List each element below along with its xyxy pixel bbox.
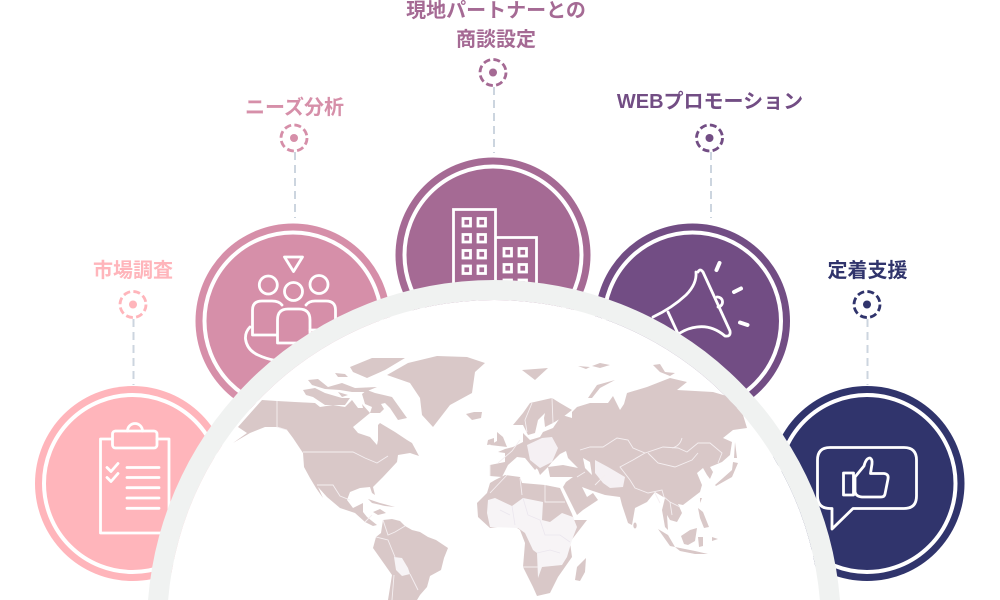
step 1: market research <box>35 259 230 581</box>
Arctic islands <box>303 358 405 405</box>
icon: thumbs-up speech bubble <box>818 448 916 529</box>
Sakhalin and Japan <box>715 442 738 486</box>
Iceland <box>466 412 482 420</box>
target marker <box>120 292 146 318</box>
Novaya Zemlya <box>588 380 615 398</box>
Madagascar <box>575 558 586 581</box>
Scandinavia <box>513 398 572 435</box>
Southeast Asian islands <box>658 498 718 554</box>
step 2: needs analysis <box>196 95 390 418</box>
target marker <box>480 60 506 86</box>
globe interior <box>168 300 820 600</box>
step 5: settlement support <box>770 259 964 581</box>
target marker <box>854 292 880 318</box>
step 3: local partner meetings <box>396 0 590 352</box>
circle badge <box>396 158 590 352</box>
icon: people <box>245 257 336 362</box>
world map <box>233 356 747 600</box>
icon: megaphone <box>653 263 748 338</box>
faint African borders <box>500 498 570 553</box>
Baffin Island <box>362 390 407 420</box>
country borders <box>277 398 722 600</box>
label: WEBプロモーション: WEBプロモーション <box>617 90 803 113</box>
label: 定着支援: 定着支援 <box>828 259 908 282</box>
circle badge <box>35 386 230 581</box>
Svalbard <box>522 368 548 380</box>
Greenland <box>387 356 485 427</box>
circle badge <box>595 224 790 418</box>
Africa lighter regions <box>487 498 577 578</box>
icon: buildings <box>454 210 536 300</box>
connector line <box>866 319 868 385</box>
British Isles <box>487 432 507 447</box>
label: 現地パートナーとの商談設定: 現地パートナーとの <box>406 0 586 22</box>
northern islands <box>578 363 675 376</box>
target marker <box>281 125 307 151</box>
circle badge <box>770 386 964 581</box>
icon: clipboard <box>100 424 169 533</box>
connector line <box>493 87 495 153</box>
Africa <box>477 475 587 596</box>
arc ring <box>148 280 840 600</box>
target marker <box>696 125 722 151</box>
connector line <box>132 319 134 385</box>
Bolivia and Paraguay lighter region <box>394 557 410 576</box>
Europe and Asia lighter regions <box>527 437 625 488</box>
label: ニーズ分析: ニーズ分析 <box>245 95 344 119</box>
Eurasia <box>490 378 747 530</box>
Caribbean islands <box>368 499 395 515</box>
globe arc with world map <box>148 280 840 600</box>
inland seas <box>548 451 592 475</box>
South America <box>373 519 448 600</box>
label: 現地パートナーとの商談設定: 商談設定 <box>456 28 536 51</box>
circle badge <box>196 224 390 418</box>
label: 市場調査: 市場調査 <box>93 259 173 282</box>
North America <box>233 400 419 526</box>
Sri Lanka <box>633 522 637 528</box>
connector line <box>294 152 296 218</box>
step 4: web promotion <box>595 90 803 418</box>
connector line <box>710 152 712 218</box>
